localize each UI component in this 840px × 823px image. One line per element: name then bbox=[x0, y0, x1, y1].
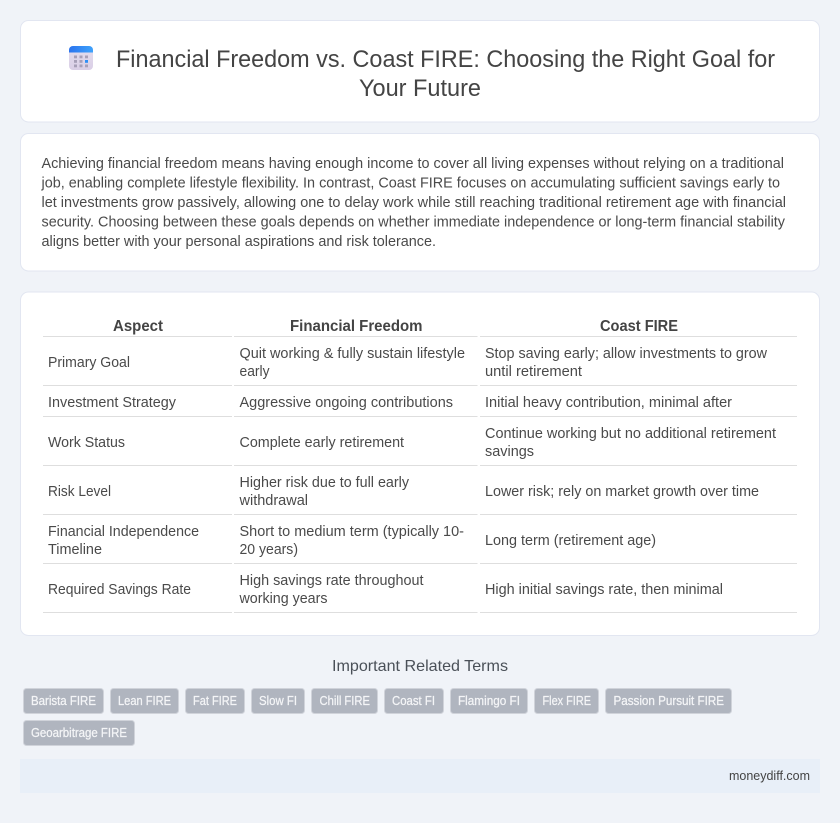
tag: Geoarbitrage FIRE: Geoarbitrage FIRE bbox=[31, 726, 127, 740]
row: primary goal bbox=[43, 346, 797, 386]
tag: Barista FIRE bbox=[24, 688, 104, 714]
row: financial independence timeline: Short to medium term (typically 10- bbox=[240, 524, 464, 540]
tag: Lean FIRE bbox=[110, 688, 178, 714]
tag: Flamingo FI bbox=[450, 688, 528, 714]
row: financial independence timeline: Long term (retirement age) bbox=[485, 533, 656, 549]
table header row: Coast FIRE bbox=[600, 318, 678, 335]
row: required savings rate: High initial savings rate, then minimal bbox=[485, 582, 723, 598]
row: investment strategy: Aggressive ongoing contributions bbox=[240, 395, 453, 411]
row: risk level: withdrawal bbox=[238, 493, 308, 509]
row: primary goal: Quit working & fully sustain lifestyle bbox=[240, 346, 465, 362]
tag: Coast FI: Coast FI bbox=[392, 694, 435, 708]
panel: comparison table bbox=[20, 292, 820, 636]
row: financial independence timeline: Timeline bbox=[48, 542, 102, 558]
row: investment strategy bbox=[43, 395, 797, 417]
text block: introduction: aligns better with your personal aspirations and risk tolerance. bbox=[42, 234, 436, 250]
panel: related term tags bbox=[24, 688, 732, 746]
row: work status: Continue working but no additional retirement bbox=[485, 426, 776, 442]
tag: Passion Pursuit FIRE bbox=[606, 688, 732, 714]
row: risk level: Risk Level bbox=[48, 484, 111, 500]
row: investment strategy: Investment Strategy bbox=[48, 395, 177, 411]
footer bbox=[20, 759, 820, 793]
row: financial independence timeline bbox=[43, 524, 797, 564]
tag: Geoarbitrage FIRE bbox=[24, 720, 134, 746]
tag: Flex FIRE: Flex FIRE bbox=[542, 694, 591, 708]
row: required savings rate: Required Savings Rate bbox=[48, 582, 191, 598]
tag: Chill FIRE: Chill FIRE bbox=[320, 694, 370, 708]
row: primary goal: Primary Goal bbox=[48, 355, 130, 371]
row: work status bbox=[43, 426, 797, 466]
tag: Chill FIRE bbox=[312, 688, 378, 714]
panel: header bbox=[20, 20, 820, 122]
row: primary goal: early bbox=[240, 364, 270, 380]
row: required savings rate: High savings rate throughout bbox=[240, 573, 424, 589]
text block: introduction: let investments grow passively, allowing one to delay work while still reaching traditional retirement age with financial bbox=[42, 195, 786, 211]
table header row: Aspect bbox=[113, 318, 164, 335]
text block: introduction bbox=[40, 156, 786, 250]
row: required savings rate: working years bbox=[239, 591, 328, 607]
row: work status: savings bbox=[485, 444, 534, 460]
table header row: Financial Freedom bbox=[290, 318, 422, 335]
panel: description bbox=[20, 134, 820, 271]
tag: Slow FI bbox=[252, 688, 304, 714]
row: risk level: Higher risk due to full early bbox=[240, 475, 410, 491]
title: Financial Freedom vs. Coast FIRE: Choosing the Right Goal for bbox=[116, 46, 775, 73]
title: Your Future bbox=[359, 75, 481, 102]
tag: Barista FIRE: Barista FIRE bbox=[31, 694, 96, 708]
tag: Flex FIRE bbox=[534, 688, 598, 714]
row: primary goal: until retirement bbox=[485, 364, 582, 380]
text block: introduction: Achieving financial freedom means having enough income to cover all living expenses without relying on a traditional bbox=[42, 156, 784, 172]
row: risk level bbox=[43, 475, 797, 515]
tag: Flamingo FI: Flamingo FI bbox=[458, 694, 520, 708]
row: required savings rate bbox=[43, 573, 797, 613]
tag: Fat FIRE: Fat FIRE bbox=[193, 694, 237, 708]
text block: introduction: security. Choosing between these goals depends on whether immediate independence or long-term financial stability bbox=[42, 214, 786, 230]
tag: Passion Pursuit FIRE: Passion Pursuit FIRE bbox=[614, 694, 724, 708]
text block: introduction: job, enabling complete lifestyle flexibility. In contrast, Coast FIRE focuses on accumulating sufficient savings early to bbox=[40, 176, 780, 192]
row: risk level: Lower risk; rely on market growth over time bbox=[485, 484, 759, 500]
row: financial independence timeline: Financial Independence bbox=[48, 524, 199, 540]
heading: important related terms: Important Related Terms bbox=[332, 658, 508, 675]
tag: Slow FI: Slow FI bbox=[259, 694, 297, 708]
row: financial independence timeline: 20 years) bbox=[240, 542, 298, 558]
tag: Fat FIRE bbox=[186, 688, 244, 714]
footer source text: moneydiff.com bbox=[729, 769, 810, 783]
row: work status: Work Status bbox=[48, 435, 125, 451]
tag: Coast FI bbox=[384, 688, 444, 714]
row: primary goal: Stop saving early; allow investments to grow bbox=[485, 346, 768, 362]
table header row bbox=[43, 318, 797, 337]
row: investment strategy: Initial heavy contribution, minimal after bbox=[485, 395, 732, 411]
title bbox=[116, 46, 775, 102]
icon: calendar bbox=[69, 46, 93, 70]
row: work status: Complete early retirement bbox=[240, 435, 404, 451]
tag: Lean FIRE: Lean FIRE bbox=[118, 694, 171, 708]
